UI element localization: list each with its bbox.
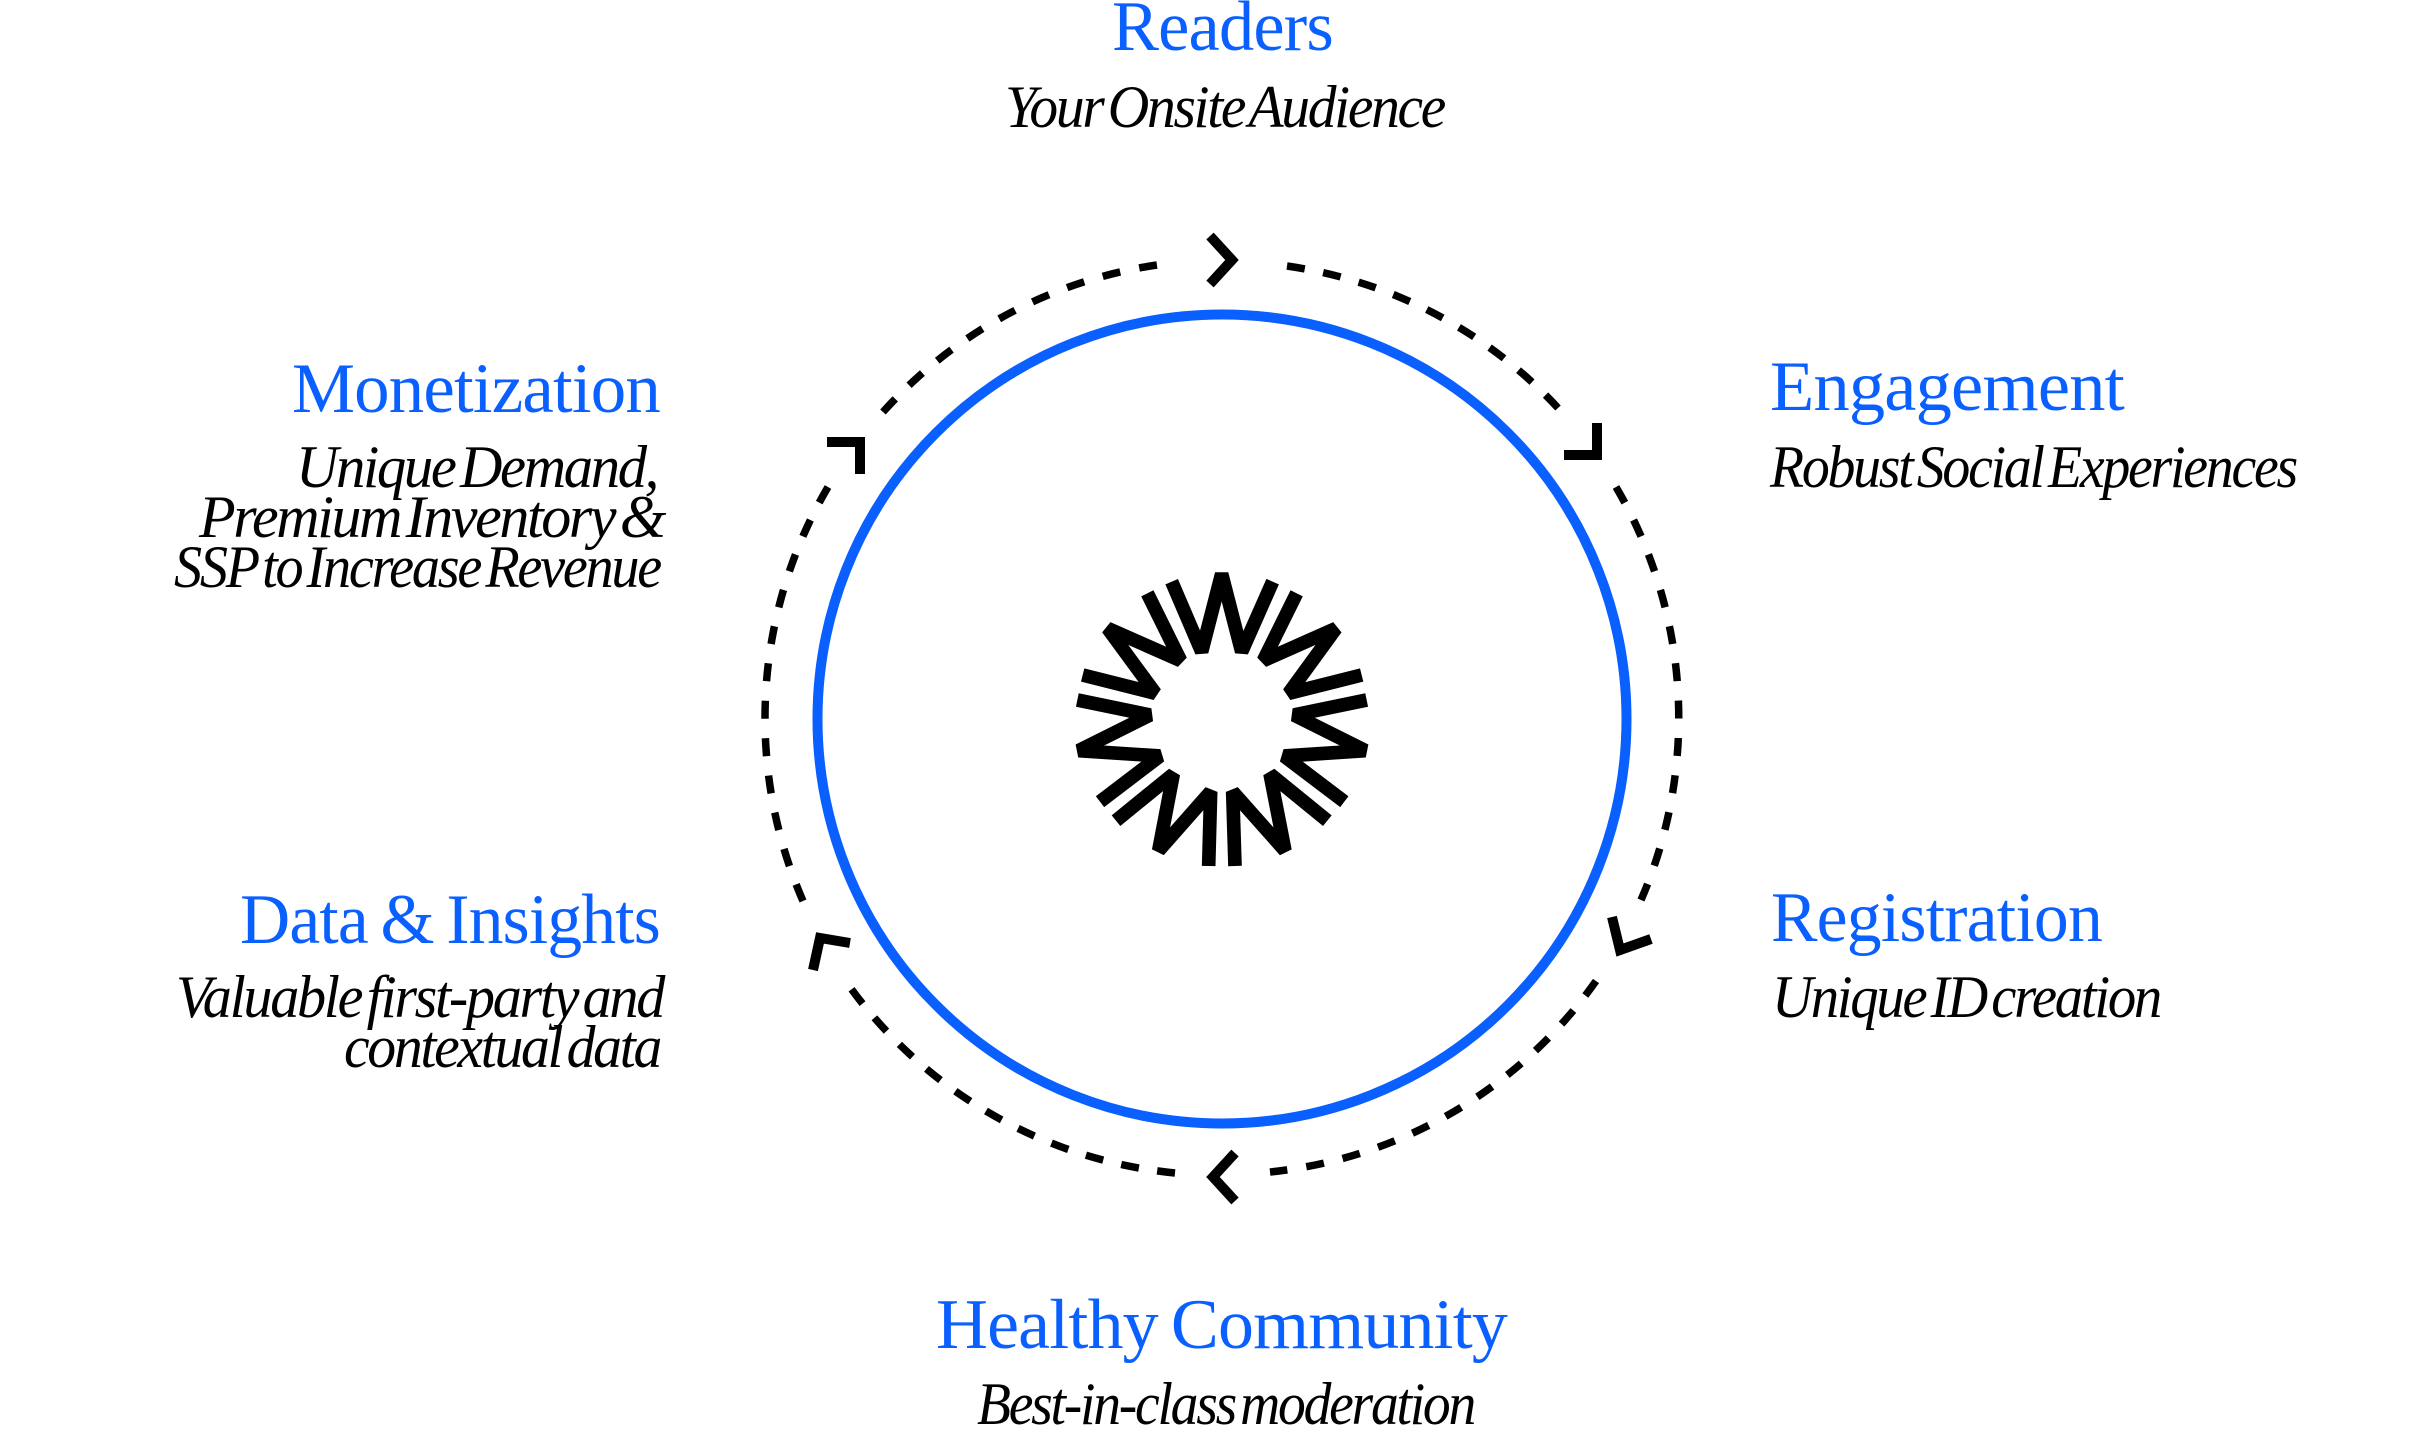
- arrow: upper right: [1564, 423, 1597, 455]
- heading: Healthy Community: [936, 1286, 1508, 1364]
- arc: Engagement to Registration: [1616, 487, 1679, 900]
- description: Valuable first-party and: [176, 964, 666, 1030]
- label: Engagement: [1769, 348, 2297, 500]
- description: Your Onsite Audience: [1005, 74, 1446, 140]
- arrow: lower left: [813, 938, 850, 970]
- dashed cycle with arrows: [765, 236, 1679, 1201]
- arc: Monetization to Readers: [883, 265, 1157, 412]
- arc: Data and Insights to Monetization: [765, 487, 828, 901]
- description: [174, 434, 667, 600]
- description: Unique Demand,: [296, 434, 657, 500]
- arrow: top: [1210, 236, 1232, 284]
- label: Readers: [1005, 0, 1446, 140]
- description: Unique ID creation: [1772, 964, 2160, 1030]
- heading: Registration: [1771, 879, 2102, 957]
- description: Robust Social Experiences: [1769, 434, 2297, 500]
- arrow: lower right: [1612, 917, 1651, 950]
- heading: Monetization: [292, 350, 660, 428]
- description: contextual data: [344, 1014, 660, 1080]
- label: Registration: [1771, 879, 2160, 1030]
- label: Data and Insights: [176, 881, 666, 1080]
- arrow: bottom: [1213, 1153, 1235, 1201]
- arc: Healthy Community to Data and Insights: [847, 983, 1175, 1173]
- description: [176, 964, 666, 1080]
- heading: Engagement: [1770, 348, 2125, 426]
- label: Monetization: [174, 350, 667, 600]
- arrow: upper left: [827, 442, 860, 474]
- description: Premium Inventory &: [198, 484, 667, 550]
- description: SSP to Increase Revenue: [174, 534, 662, 600]
- arc: Readers to Engagement: [1287, 266, 1558, 408]
- blue ring: [818, 314, 1626, 1124]
- icon: central starburst logo: [1077, 574, 1367, 866]
- label: Healthy Community: [936, 1286, 1508, 1434]
- arc: Registration to Healthy Community: [1270, 981, 1596, 1172]
- heading: Data & Insights: [240, 881, 660, 959]
